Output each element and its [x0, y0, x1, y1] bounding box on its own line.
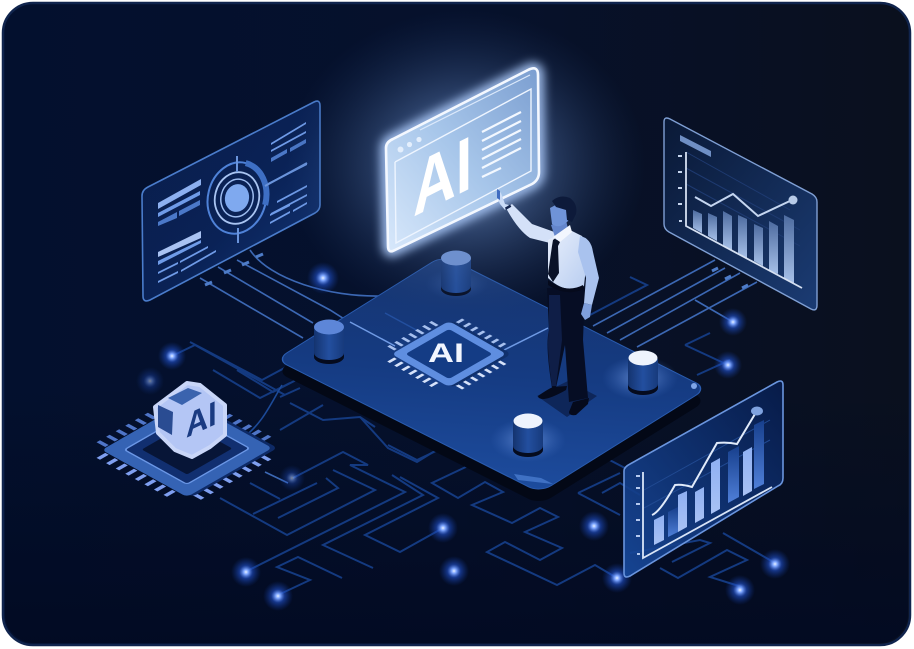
window halo — [285, 10, 645, 320]
belt — [548, 280, 584, 292]
hair — [552, 197, 576, 222]
panel: target dashboard — [142, 101, 320, 301]
neck and collar — [551, 220, 568, 240]
platform — [276, 255, 707, 505]
shoes — [538, 386, 567, 399]
icon: AI cube: AI — [186, 394, 217, 446]
figure: man in shirt and tie — [497, 189, 599, 417]
panel: line and bar chart upper right — [664, 118, 817, 310]
chart end marker — [751, 406, 763, 416]
right arm — [578, 236, 599, 305]
cylinders — [314, 250, 658, 457]
right hand — [581, 303, 592, 320]
circuit traces — [172, 277, 775, 595]
glowing node dots — [136, 262, 790, 611]
raised arm — [506, 204, 560, 245]
chip: central AI processor — [381, 315, 517, 393]
panel connector lines — [200, 250, 757, 483]
chip label: AI — [428, 338, 464, 368]
chip: left AI module — [91, 383, 283, 503]
shadow — [537, 381, 597, 417]
cylinder front — [513, 414, 543, 457]
chart end marker — [788, 196, 798, 204]
panel: glowing AI window — [386, 68, 539, 251]
cylinder right — [628, 350, 658, 395]
cylinder left — [314, 320, 344, 364]
icon: AI cube — [155, 383, 225, 457]
icon: target rings — [200, 156, 274, 240]
panel: growth chart lower right — [624, 381, 783, 577]
hand — [497, 190, 509, 210]
tie — [548, 237, 560, 282]
window label: AI — [413, 119, 472, 234]
head — [550, 200, 569, 226]
cylinder back — [441, 250, 471, 296]
torso — [548, 229, 588, 289]
legs — [547, 288, 588, 402]
